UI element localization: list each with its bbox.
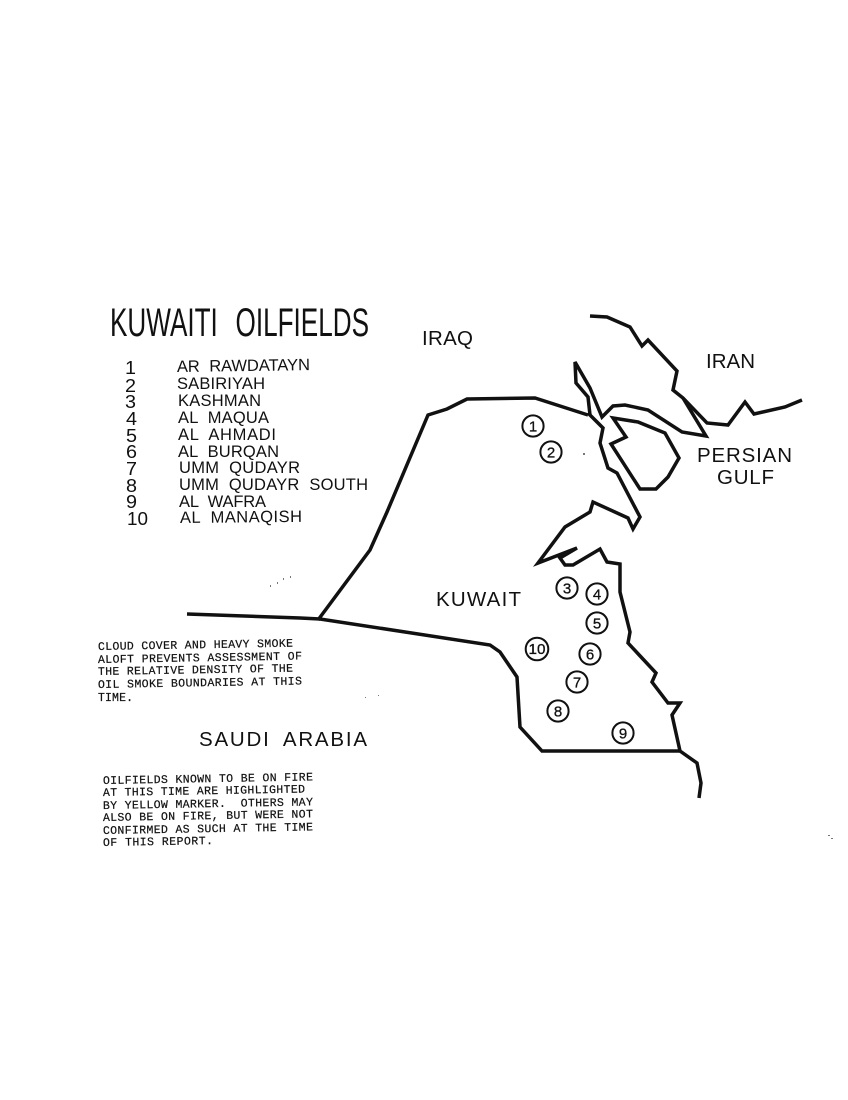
note: cloud cover: TIME. (98, 692, 133, 705)
note: oilfields on fire: CONFIRMED AS SUCH AT THE TIME (103, 821, 313, 838)
marker: oilfield 7 (566, 671, 588, 693)
marker: oilfield 2: 2 (547, 444, 555, 462)
marker: oilfield 4 (586, 583, 608, 605)
title: KUWAITI OILFIELDS (110, 301, 369, 345)
marker: oilfield 9 (612, 722, 634, 744)
note: oilfields on fire (103, 771, 313, 850)
marker: oilfield 7: 7 (573, 674, 581, 692)
note: cloud cover: OIL SMOKE BOUNDARIES AT THIS (98, 675, 302, 692)
legend: oilfield list: 2 (125, 376, 136, 396)
legend: oilfield list: 9 (126, 492, 137, 512)
marker: oilfield 10 (526, 638, 548, 660)
legend: oilfield list: KASHMAN (178, 392, 261, 410)
legend: oilfield list: AL WAFRA (179, 493, 266, 511)
Shatt al-Arab inlet (575, 362, 706, 436)
Saudi Arabia border (187, 614, 680, 751)
marker: oilfield 1 (522, 415, 544, 437)
note: cloud cover (98, 638, 302, 705)
Iran coastline (590, 316, 802, 425)
country label: Iran: IRAN (706, 350, 755, 373)
legend: oilfield list: SABIRIYAH (177, 375, 265, 393)
note: cloud cover: ALOFT PREVENTS ASSESSMENT OF (98, 650, 302, 667)
marker: oilfield 6 (579, 643, 601, 665)
Kuwait coastline north (538, 413, 701, 798)
legend: oilfield list: 10 (127, 509, 148, 529)
water label: Persian Gulf (697, 444, 792, 489)
note: oilfields on fire: ALSO BE ON FIRE, BUT WERE NOT (103, 808, 313, 825)
legend: oilfield list: UMM QUDAYR (179, 459, 300, 477)
legend: oilfield list: 8 (126, 476, 137, 496)
note: cloud cover: CLOUD COVER AND HEAVY SMOKE (98, 638, 293, 654)
marker: oilfield 8: 8 (554, 704, 562, 720)
Iraq-Kuwait border (318, 398, 588, 620)
country label: Saudi Arabia: SAUDI ARABIA (199, 728, 367, 751)
marker: oilfield 4: 4 (593, 586, 601, 604)
water label: Persian Gulf: GULF (717, 466, 774, 489)
legend: oilfield list: 6 (126, 442, 137, 462)
note: oilfields on fire: AT THIS TIME ARE HIGHLIGHTED (103, 783, 305, 800)
legend: oilfield list: AL MAQUA (178, 409, 269, 427)
marker: oilfield 8 (547, 700, 569, 722)
note: oilfields on fire: OF THIS REPORT. (103, 835, 213, 850)
legend: oilfield list: UMM QUDAYR SOUTH (179, 476, 368, 494)
legend: oilfield list: AL AHMADI (178, 426, 276, 444)
country label: Kuwait: KUWAIT (436, 588, 521, 611)
country label: Iraq: IRAQ (422, 327, 473, 350)
legend: oilfield list: 1 (125, 358, 136, 378)
legend: oilfield list: 3 (125, 392, 136, 412)
legend: oilfield list: 7 (126, 459, 137, 479)
marker: oilfield 3 (556, 577, 578, 599)
marker: oilfield 1: 1 (529, 418, 537, 436)
marker: oilfield 5: 5 (593, 616, 601, 632)
note: cloud cover: THE RELATIVE DENSITY OF THE (98, 663, 293, 679)
water label: Persian Gulf: PERSIAN (697, 444, 792, 467)
note: oilfields on fire: OILFIELDS KNOWN TO BE ON FIRE (103, 771, 313, 788)
legend: oilfield list: 4 (126, 409, 137, 429)
marker: oilfield 3: 3 (563, 580, 571, 598)
legend: oilfield list (125, 356, 368, 529)
Bubiyan island (611, 418, 679, 489)
legend: oilfield list: AL MANAQISH (180, 508, 302, 527)
note: oilfields on fire: BY YELLOW MARKER. OTHERS MAY (103, 796, 313, 813)
marker: oilfield 10: 10 (528, 641, 546, 658)
marker: oilfield 6: 6 (586, 646, 594, 664)
map: boundary lines (187, 316, 802, 798)
marker: oilfield 5 (586, 612, 608, 634)
legend: oilfield list: AR RAWDATAYN (177, 356, 310, 376)
marker: oilfield 9: 9 (619, 726, 627, 742)
legend: oilfield list: 5 (126, 426, 137, 446)
legend: oilfield list: AL BURQAN (178, 443, 279, 461)
marker: oilfield 2 (540, 441, 562, 463)
